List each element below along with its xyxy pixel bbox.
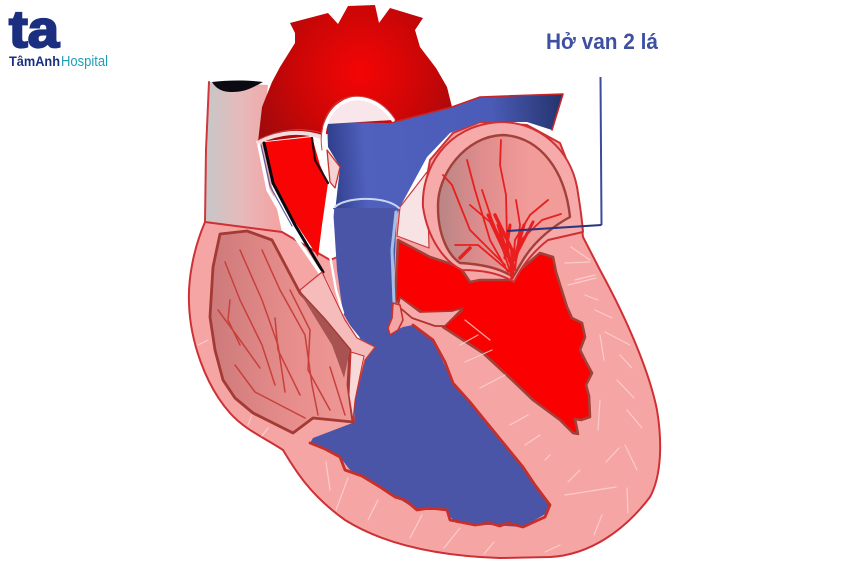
septal strips between aorta and pulmonary artery (327, 150, 340, 188)
logo hospital word: Hospital (61, 53, 108, 70)
aortic root outline (258, 130, 322, 140)
logo name: TâmAnh (9, 53, 60, 69)
aorta (258, 5, 452, 142)
right ventricle band (300, 272, 375, 422)
callout leader line (507, 77, 602, 231)
heart wall muscle highlights (198, 247, 642, 554)
right atrium light edge left (329, 210, 343, 313)
left atrium chamber (438, 135, 570, 277)
right ventricle dark wedge (300, 293, 350, 378)
leader vertical (600, 77, 602, 225)
logo mark: ta (9, 1, 60, 59)
blue line along aorta (261, 145, 292, 226)
callout title: Hở van 2 lá (546, 29, 659, 54)
right atrium and ventricle blood (310, 208, 550, 527)
right atrium top border (335, 199, 399, 208)
aortic root cap (258, 133, 322, 142)
superior vena cava (205, 80, 282, 232)
pulmonary artery (327, 94, 563, 212)
mitral chordae (443, 140, 561, 278)
vena cava left edge (205, 82, 209, 222)
leader horizontal (507, 225, 602, 231)
arch ring red edge (321, 96, 395, 150)
vena cava tube (205, 82, 282, 232)
aorta black wall left (264, 143, 323, 272)
heart illustration (189, 5, 660, 558)
tricuspid valve leaflet (388, 303, 403, 335)
vena cava opening (212, 80, 263, 92)
left atrium outer wall (423, 122, 583, 282)
right ventricle trabeculae (218, 250, 345, 418)
right ventricle pale strip (349, 352, 364, 420)
pulmonary artery upper edge (390, 94, 563, 130)
jagged lower ventricle border (310, 325, 550, 527)
right ventricle chamber (210, 231, 353, 433)
mitral valve base (398, 297, 463, 326)
arch ring stroke (323, 99, 393, 150)
ascending aorta blood (265, 137, 328, 257)
right atrium light edge right (392, 212, 396, 303)
pale tissue behind pulmonary artery (397, 172, 429, 248)
white band along aorta (259, 145, 358, 338)
left ventricle and atrium blood (395, 240, 592, 434)
logo: Tam Anh Hospital (9, 1, 108, 70)
heart muscle wall (189, 122, 660, 558)
aorta black wall right (312, 138, 328, 183)
pulmonary arch white ring (323, 97, 393, 150)
